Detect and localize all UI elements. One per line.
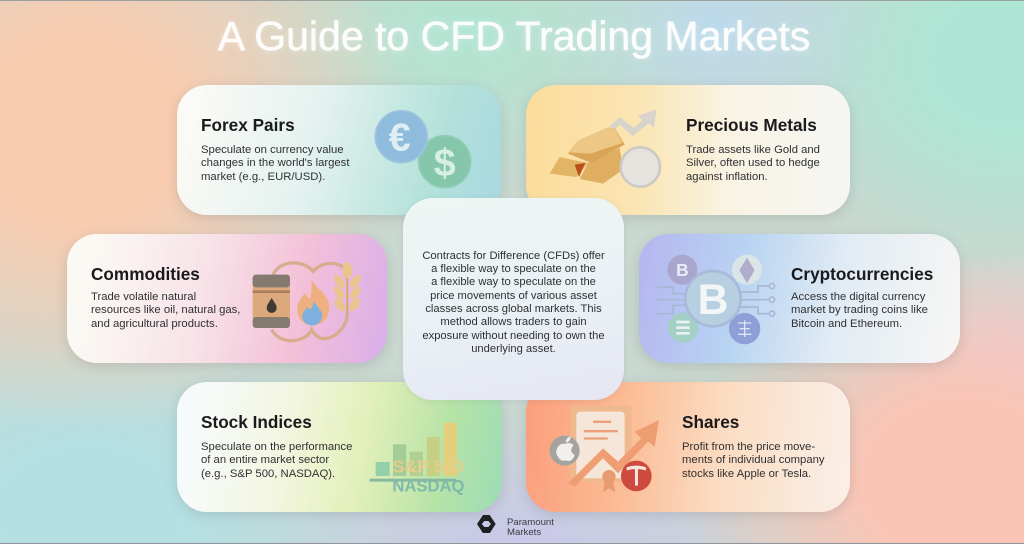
text: shares — [682, 441, 825, 480]
icon: logo mark — [477, 515, 496, 533]
text: centre introduction: a flexible way to speculate on the — [431, 263, 596, 275]
panel: precious metals — [526, 85, 850, 215]
text: centre introduction: a flexible way to speculate on the — [431, 276, 596, 288]
text: commodities: Trade volatile natural — [91, 291, 196, 303]
text: shares: Profit from the price move- — [682, 441, 815, 453]
text: forex pairs: market (e.g., EUR/USD). — [201, 171, 325, 183]
top edge strip — [0, 0, 1024, 1]
text: forex pairs: Speculate on currency value — [201, 144, 344, 156]
text: commodities: and agricultural products. — [91, 318, 218, 330]
title: A Guide to CFD Trading Markets — [218, 13, 810, 59]
logo: Paramount Markets — [477, 515, 554, 538]
text: precious metals: against inflation. — [686, 171, 768, 183]
icon: index bar chart: NASDAQ — [393, 477, 465, 496]
text: forex pairs: changes in the world's largest — [201, 157, 349, 169]
text: centre introduction: method allows traders to gain — [440, 316, 587, 328]
heading: forex pairs: Forex Pairs — [201, 114, 295, 134]
panel: centre introduction — [403, 198, 624, 400]
text: precious metals: Silver, often used to hedge — [686, 157, 820, 169]
heading: precious metals: Precious Metals — [686, 114, 817, 134]
icon: index bar chart: S&P 500 — [393, 457, 464, 477]
text: shares: ments of individual company — [682, 454, 825, 466]
bottom edge strip — [0, 542, 1024, 544]
heading: cryptocurrencies: Cryptocurrencies — [791, 264, 933, 284]
text: cryptocurrencies: market by trading coins like — [791, 304, 928, 316]
panel: forex pairs — [177, 85, 501, 215]
icon: bitcoin network coins: B — [676, 260, 689, 280]
text: centre introduction: classes across global markets. This — [425, 303, 602, 315]
icon: index bar chart — [370, 422, 465, 496]
panel: stock indices — [177, 382, 502, 512]
text: stock indices — [201, 441, 352, 480]
text: stock indices: Speculate on the performance — [201, 441, 352, 453]
text: centre introduction — [422, 250, 605, 355]
icon: euro and dollar coins: $ — [434, 141, 456, 185]
text: centre introduction: underlying asset. — [471, 343, 556, 355]
text: centre introduction: exposure without needing to own the — [422, 330, 605, 342]
icon: oil barrel, gas flame and wheat — [252, 261, 361, 342]
text: cryptocurrencies: Access the digital currency — [791, 291, 925, 303]
panel: commodities — [67, 234, 387, 363]
text: centre introduction: price movements of various asset — [430, 290, 597, 302]
icon: euro and dollar coins — [374, 110, 472, 188]
icon: bitcoin network coins: B — [698, 276, 729, 324]
text: logo name — [507, 516, 554, 538]
heading: commodities: Commodities — [91, 264, 200, 284]
text: centre introduction: Contracts for Difference (CFDs) offer — [422, 250, 605, 262]
heading: shares: Shares — [682, 412, 739, 432]
text: stock indices: of an entire market sector — [201, 454, 329, 466]
text: logo name: Paramount — [507, 516, 554, 528]
text: cryptocurrencies — [791, 291, 928, 330]
heading: stock indices: Stock Indices — [201, 412, 312, 432]
text: cryptocurrencies: Bitcoin and Ethereum. — [791, 318, 902, 330]
panel: cryptocurrencies — [639, 234, 960, 363]
text: precious metals: Trade assets like Gold and — [686, 144, 820, 156]
text: stock indices: (e.g., S&P 500, NASDAQ). — [201, 468, 335, 480]
text: commodities: resources like oil, natural gas, — [91, 304, 240, 316]
icon: gold bars, silver coin and arrow — [550, 110, 662, 188]
text: shares: stocks like Apple or Tesla. — [682, 468, 811, 480]
text: precious metals — [686, 144, 820, 183]
text: forex pairs — [201, 144, 350, 183]
text: logo name: Markets — [507, 527, 541, 538]
icon: share certificate, arrow and company logos — [550, 406, 659, 492]
text: commodities — [91, 291, 240, 330]
panel: shares — [526, 382, 850, 512]
icon: bitcoin network coins — [656, 254, 776, 344]
icon: euro and dollar coins: € — [389, 116, 411, 160]
